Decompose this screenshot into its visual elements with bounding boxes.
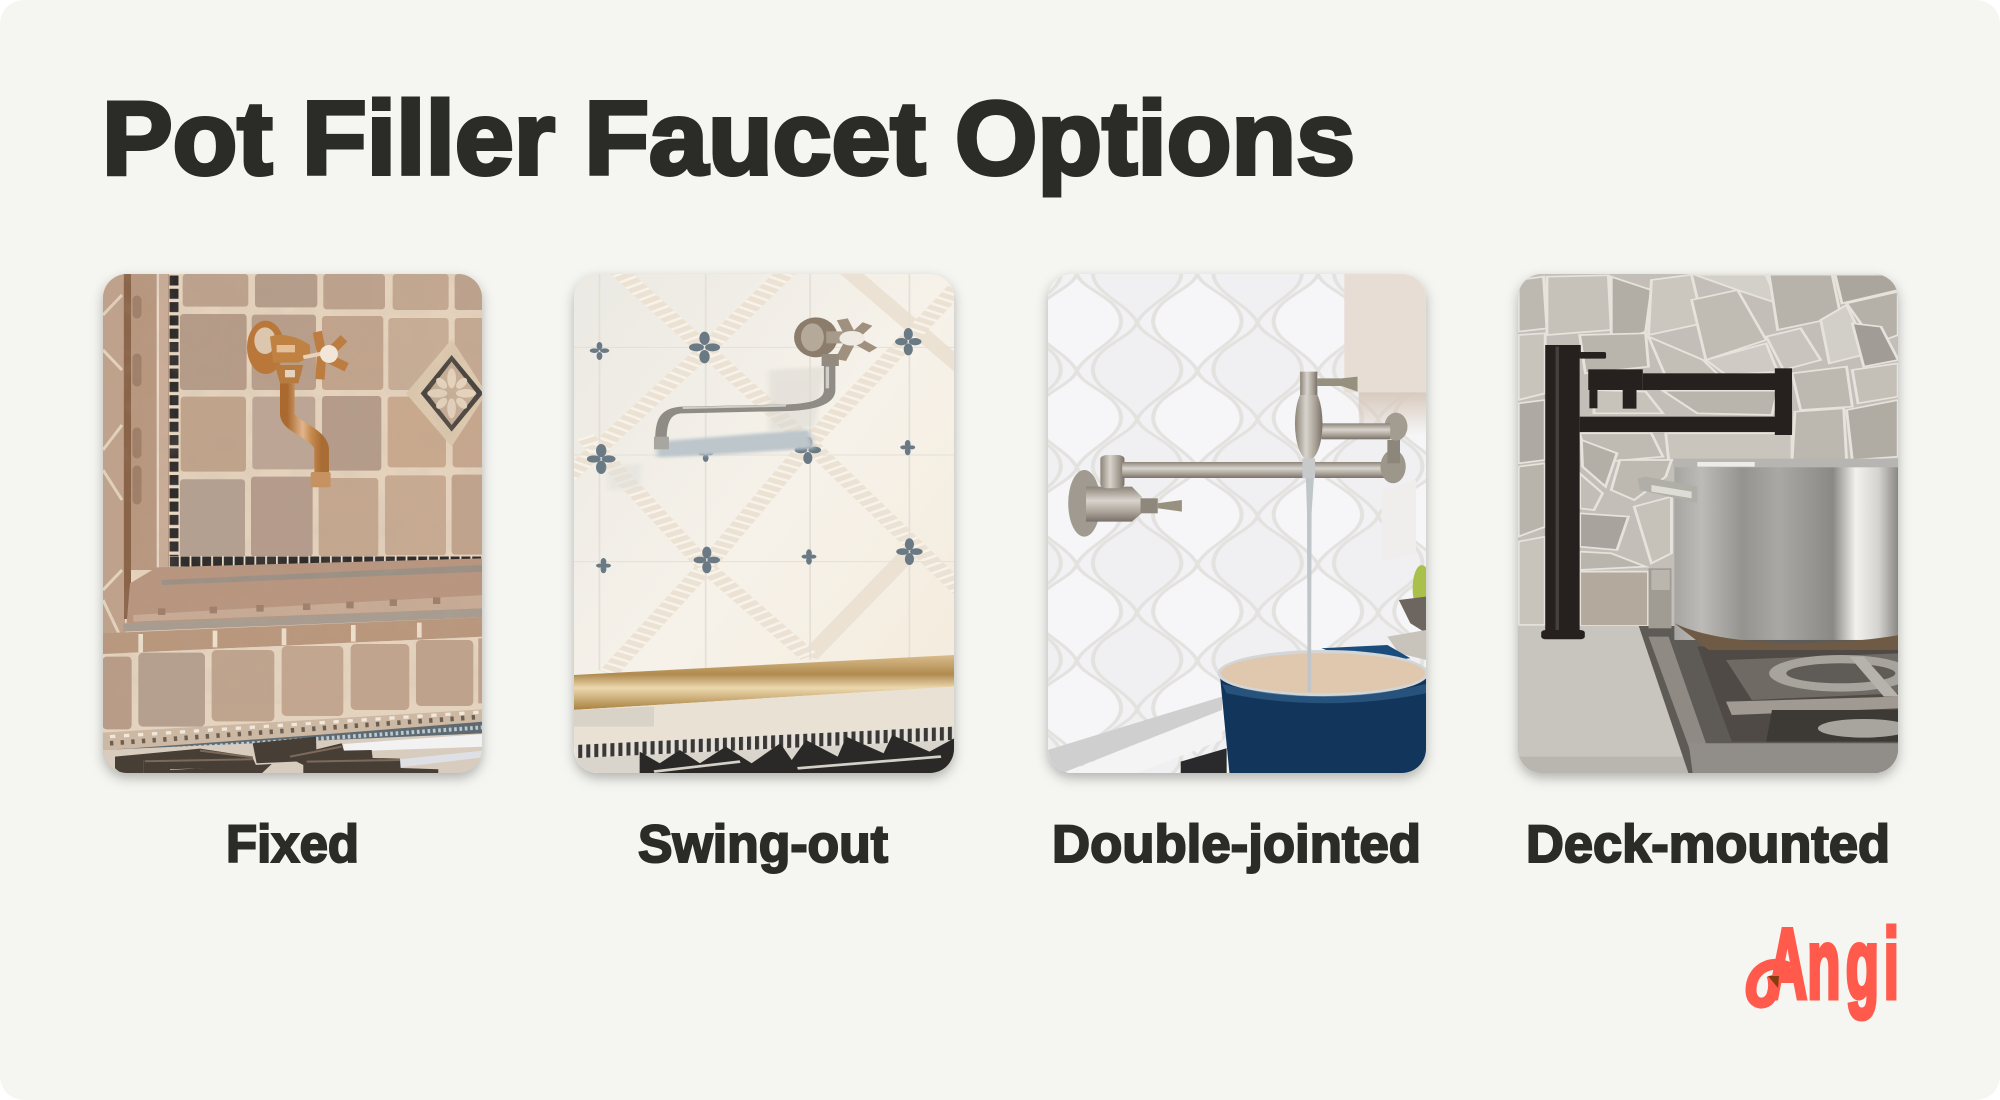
label: Double-jointed: Double-jointed — [1052, 815, 1421, 874]
counter — [1580, 626, 1639, 627]
rope trim — [103, 617, 483, 654]
logo: Angi: Angi — [1768, 909, 1899, 1019]
faucet: brass wall-mount — [247, 321, 347, 487]
photo: cream diamond backsplash — [568, 267, 964, 775]
card: deck-mounted pot filler — [1518, 274, 1913, 774]
white rail — [343, 734, 483, 753]
card: fixed pot filler — [103, 274, 487, 775]
faucet: brushed nickel double-jointed — [1068, 372, 1407, 537]
card: swing-out pot filler — [568, 267, 964, 775]
lower molding, trim, tiles and range — [103, 558, 485, 775]
mottled stone texture — [124, 275, 461, 566]
label: Deck-mounted: Deck-mounted — [1526, 815, 1890, 874]
range grate — [115, 737, 438, 775]
photo: stone tile backsplash — [103, 274, 487, 775]
frame molding — [103, 274, 482, 773]
title: Pot Filler Faucet Options — [102, 81, 1355, 197]
faucet: nickel swing-out — [654, 317, 873, 449]
range vent and grates — [575, 727, 954, 758]
wood molding — [574, 655, 954, 710]
blue pot — [1322, 645, 1410, 659]
diamond medallion — [406, 339, 487, 447]
photo: stone mosaic wall and cooktop — [1518, 274, 1913, 774]
fruit bowl — [1412, 565, 1426, 598]
label: Fixed: Fixed — [226, 815, 359, 874]
spout shadow — [657, 429, 815, 457]
stock pot — [1674, 462, 1901, 640]
water stream — [1306, 478, 1314, 692]
rubble strip — [103, 709, 483, 750]
photo: white arabesque tile and pot — [1048, 274, 1431, 774]
faucet: matte black deck-mounted — [1541, 345, 1792, 639]
counter edge — [1048, 697, 1222, 774]
cooktop — [1639, 626, 1899, 774]
label: Swing-out: Swing-out — [638, 815, 888, 874]
decorative flower inserts — [587, 328, 923, 573]
card: double-jointed pot filler — [1048, 274, 1431, 774]
mesh vent — [110, 722, 482, 750]
